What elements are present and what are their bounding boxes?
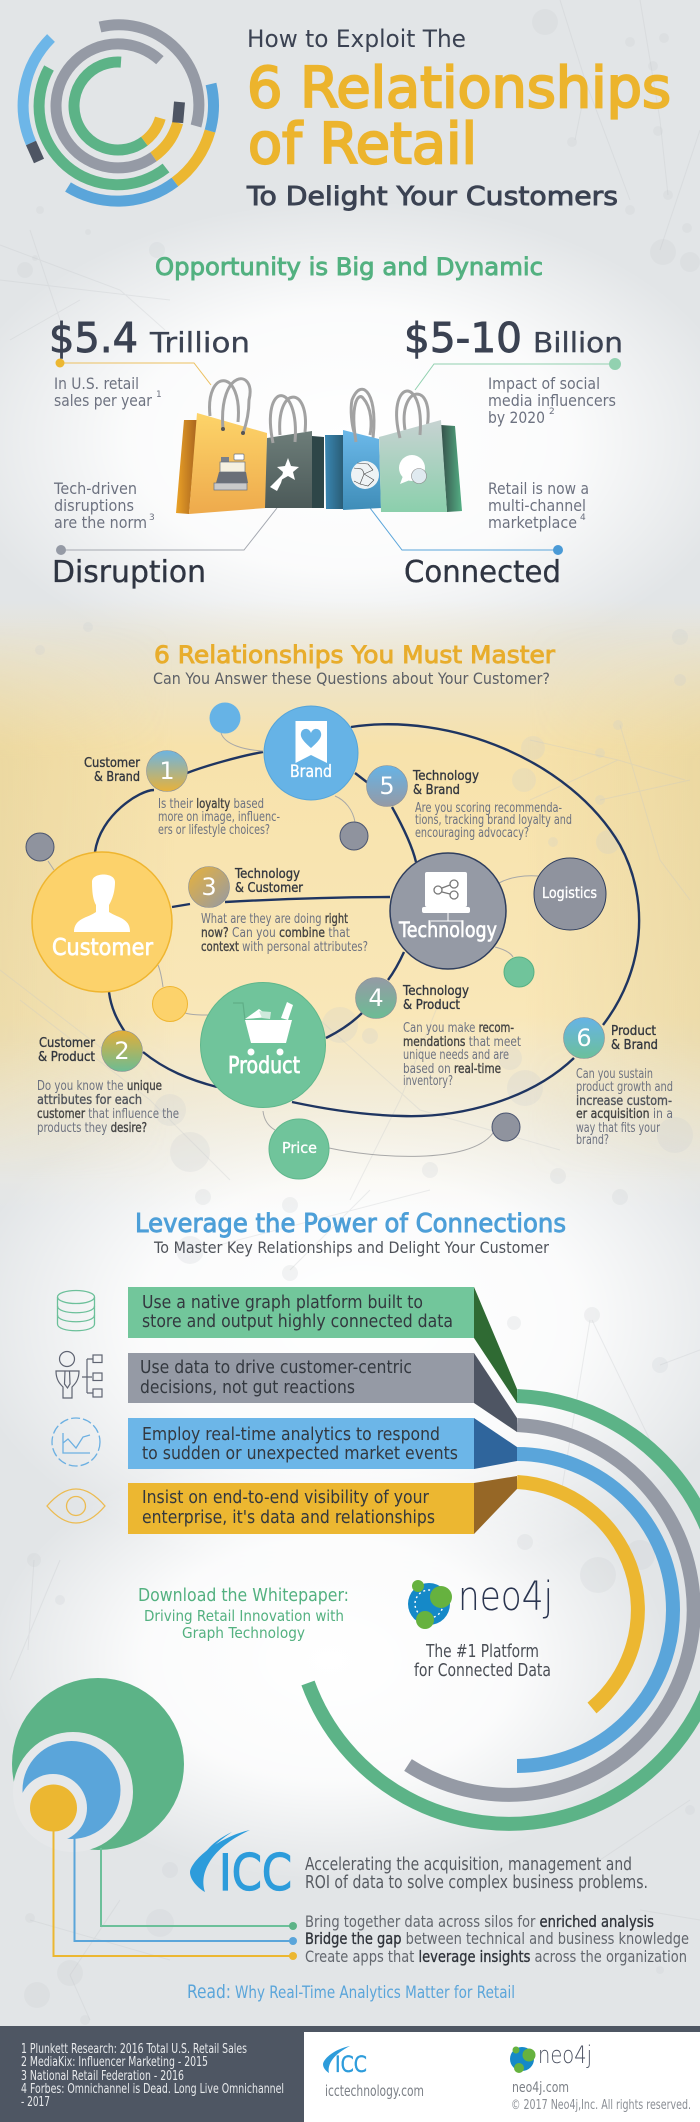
relationship 6: Product [611,1024,656,1039]
footnotes: 2 MediaKix: Influencer Marketing - 2015 [21,2055,208,2070]
relationship 5: Technology [412,769,479,784]
neo4j logo [408,1574,553,1629]
relationship 6: brand? [576,1133,609,1148]
title: How to Exploit The [247,25,466,53]
stat: connected: Retail is now a [488,479,589,498]
stat: 5-10 billion: by 2020 [488,408,545,427]
node: product: Product [228,1053,300,1079]
heading: leverage: Leverage the Power of Connections [135,1209,566,1239]
neo4j tagline [414,1641,551,1681]
node: brand [264,706,358,800]
relationship 3 [188,866,368,955]
whitepaper callout: Download the Whitepaper: [138,1585,349,1606]
big ribbon arcs [308,1396,700,1824]
icon: person with hierarchy [56,1352,102,1398]
thin branch lines [48,733,538,1156]
stat: connected: marketplace [488,513,577,532]
bag: dark with star cursor [265,396,324,508]
relationship 5: 5 [379,772,395,800]
read link: Read: [187,1981,231,2003]
relationship 5 [366,766,572,841]
action bar: graph platform: Use a native graph platform built to [142,1292,423,1313]
relationship 2 [37,1030,179,1136]
icc description [305,1854,648,1893]
node: logistics [534,858,606,930]
stat: 5.4 trillion [49,314,250,410]
relationship 3: 3 [201,873,217,901]
relationship 4 [356,978,521,1089]
relationship 3: Technology [234,867,300,882]
icon: database [58,1290,94,1331]
relationship 5: tions, tracking brand loyalty and [415,813,572,828]
heading: 6 relationships: 6 Relationships You Must Master [154,641,555,669]
stat: 5.4 trillion: $5.4 [49,314,138,362]
icc benefits [305,1912,689,1966]
whitepaper callout: Graph Technology [182,1624,305,1642]
relationship 1: more on image, influenc- [158,810,280,825]
relationship 1: 1 [159,757,175,785]
stat: disruption: disruptions [54,496,134,515]
heading: 6 relationships [153,641,555,688]
concentric crescent graphic [12,1678,184,1852]
node: price [269,1119,329,1179]
footer icc: ICC [335,2053,367,2078]
footer neo4j: neo4j.com [512,2080,569,2096]
bag: yellow with cash register [176,379,267,514]
icc logo [190,1830,292,1902]
small nodes [26,702,534,1141]
action bar: visibility [128,1476,517,1534]
node: brand: Brand [290,762,332,782]
relationship 6: increase custom- [576,1094,672,1109]
relationship 4: Can you make recom- [403,1021,514,1036]
neo4j tagline: for Connected Data [414,1660,551,1681]
action bar: real-time analytics: Employ real-time analytics to respond [142,1424,440,1445]
action bar: real-time analytics [128,1418,517,1469]
relationship 4: 4 [368,984,384,1012]
stat: connected: 4 [580,513,586,523]
relationship 1: ers or lifestyle choices? [158,823,270,838]
logo: concentric rings [23,25,213,201]
title: To Delight Your Customers [246,182,618,212]
neo4j logo: neo4j [458,1574,553,1620]
relationship 2: 2 [114,1037,130,1065]
relationship 2: customer that influence the [37,1107,179,1122]
footer neo4j [510,2041,691,2113]
bag: blue with network globe [325,389,381,510]
relationship 4: Technology [402,984,469,999]
read link [187,1981,515,2003]
relationship 2: & Product [38,1050,95,1065]
node: technology [390,853,506,969]
stat: 5.4 trillion: sales per year [54,391,152,410]
action bar: visibility: Insist on end-to-end visibility of your [142,1487,430,1508]
node: price: Price [282,1139,317,1157]
stat: disruption [52,479,277,590]
node: customer [32,852,172,992]
stat: disruption: Disruption [52,555,206,590]
icc benefits: Bring together data across silos for enriched analysis [305,1912,654,1931]
footer neo4j: neo4j [538,2041,592,2069]
relationship 1: Is their loyalty based [158,797,264,812]
stat: 5.4 trillion: Trillion [149,326,250,359]
relationship 4: based on real-time [403,1062,501,1077]
action bar: customer-centric: decisions, not gut reactions [140,1377,355,1398]
relationship 2: attributes for each [37,1093,142,1108]
relationship 2: Customer [39,1036,96,1051]
stat: 5-10 billion [404,314,623,427]
footnotes: 1 Plunkett Research: 2016 Total U.S. Retail Sales [21,2042,247,2057]
connection curves [95,724,639,1116]
heading: 6 relationships: Can You Answer these Questions about Your Customer? [153,669,550,688]
action bar: graph platform [128,1287,517,1403]
relationship 6: & Brand [611,1038,658,1053]
relationship 6: 6 [576,1024,592,1052]
action bar: customer-centric [128,1353,517,1432]
title: 6 Relationships [247,56,671,121]
node: logistics: Logistics [542,884,597,902]
whitepaper callout [138,1585,349,1642]
whitepaper callout: Driving Retail Innovation with [144,1607,344,1625]
relationship 2: products they desire? [37,1121,147,1136]
stat: 5-10 billion: Billion [533,326,623,359]
stat: 5.4 trillion: In U.S. retail [54,374,139,393]
relationship 5: Are you scoring recommenda- [415,801,562,816]
heading: opportunity: Opportunity is Big and Dynamic [155,253,543,281]
bag: green with speech bubbles [379,391,462,512]
stat: connected: Connected [404,555,561,590]
footnotes [21,2042,284,2110]
relationship 4: & Product [403,998,460,1013]
relationship 3: What are they are doing right [201,912,348,927]
relationship diagram [26,702,673,1179]
relationship 5: encouraging advocacy? [415,826,529,841]
read link: Why Real-Time Analytics Matter for Retail [235,1983,515,2003]
stat: connected [370,479,589,590]
relationship 5: & Brand [413,783,460,798]
neo4j tagline: The #1 Platform [425,1641,539,1662]
relationship 4: mendations that meet [403,1035,521,1050]
title: of Retail [248,112,477,177]
stat: disruption: Tech-driven [53,479,137,498]
relationship 1 [84,750,280,838]
relationship 6: way that fits your [576,1121,660,1136]
action bar: customer-centric: Use data to drive customer-centric [140,1357,412,1378]
stat: 5-10 billion: Impact of social [488,374,600,393]
icc logo: ICC [219,1844,292,1902]
heading: leverage [135,1209,566,1257]
footer icc [323,2046,424,2100]
node: customer: Customer [52,935,153,961]
relationship 1: Customer [84,756,141,771]
relationship 3: now? Can you combine that [201,926,350,941]
stat: 5.4 trillion: 1 [156,390,162,400]
stat: 5-10 billion: 2 [549,407,555,417]
stat: 5-10 billion: media influencers [488,391,616,410]
relationship 2: Do you know the unique [37,1079,162,1094]
footer [0,2026,700,2122]
stat: disruption: are the norm [54,513,147,532]
relationship 4: inventory? [403,1074,453,1089]
relationship 3: context with personal attributes? [201,940,368,955]
relationship 6: Can you sustain [576,1067,653,1082]
relationship 6 [564,1018,673,1148]
relationship 3: & Customer [235,881,304,896]
footnotes: 4 Forbes: Omnichannel is Dead. Long Live Omnichannel [21,2082,284,2097]
title [246,25,671,212]
icon: analytics chart [52,1418,100,1466]
footnotes: 3 National Retail Federation - 2016 [21,2069,184,2084]
footnotes: - 2017 [21,2095,50,2110]
stat: connected: multi-channel [488,496,586,515]
node: technology: Technology [398,918,497,942]
relationship 1: & Brand [94,770,140,785]
icon: eye [47,1489,105,1523]
node: product [200,982,326,1108]
heading: leverage: To Master Key Relationships and Delight Your Customer [153,1238,549,1257]
action bar: visibility: enterprise, it's data and relationships [142,1507,435,1528]
relationship 4: unique needs and are [403,1048,509,1063]
footer icc: icctechnology.com [325,2082,424,2100]
stat: disruption: 3 [149,513,155,523]
connector lines [54,1831,297,1960]
shopping bags [176,379,462,514]
relationship 6: er acquisition in a [576,1107,673,1122]
action bar: real-time analytics: to sudden or unexpected market events [142,1443,458,1464]
stat: 5-10 billion: $5-10 [404,314,522,362]
action bar: graph platform: store and output highly connected data [142,1311,453,1332]
